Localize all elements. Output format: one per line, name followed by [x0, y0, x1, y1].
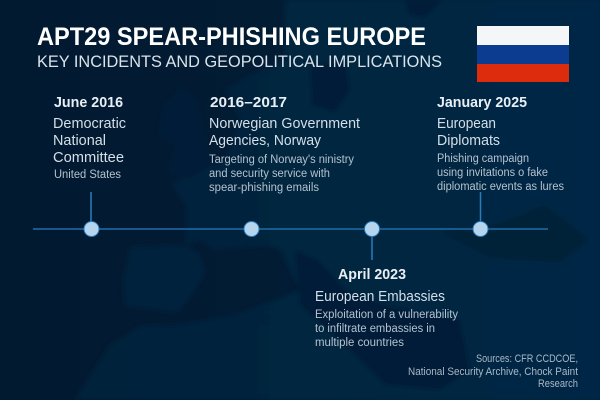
event: April 2023: to infiltrate embassies in — [315, 323, 435, 335]
event: January 2025: European — [437, 115, 496, 132]
sources — [408, 353, 578, 390]
event: June 2016: United States — [54, 169, 121, 181]
event: 2016-2017: and security service with — [209, 168, 330, 180]
sources: Sources: CFR CCDCOE, — [476, 353, 578, 365]
event: April 2023: multiple countries — [315, 337, 404, 349]
event: 2016-2017: Targeting of Norway's ninistry — [209, 154, 354, 166]
timeline — [33, 192, 548, 260]
sources: National Security Archive, Chock Paint — [408, 366, 578, 378]
event: January 2025: January 2025 — [437, 94, 527, 111]
event: April 2023: Exploitation of a vulnerability — [315, 309, 458, 321]
event: June 2016: June 2016 — [54, 94, 123, 111]
event: 2016-2017: Agencies, Norway — [209, 132, 321, 149]
event: January 2025: using invitations o fake — [437, 167, 548, 179]
event: 2016-2017 — [209, 94, 361, 194]
event: January 2025: Diplomats — [437, 132, 500, 149]
event: January 2025: Phishing campaign — [437, 153, 529, 165]
event: June 2016: National — [53, 132, 106, 149]
event: January 2025: diplomatic events as lures — [437, 181, 564, 193]
marker: January 2025 — [473, 222, 488, 236]
event: April 2023: April 2023 — [338, 266, 406, 283]
event: January 2025 — [437, 94, 564, 193]
sources: Research — [538, 378, 578, 390]
event: June 2016 — [53, 94, 126, 181]
event: April 2023 — [315, 266, 458, 349]
marker: 2016-2017 — [244, 222, 259, 236]
subtitle: KEY INCIDENTS AND GEOPOLITICAL IMPLICATIONS — [37, 52, 442, 71]
marker: June 2016 — [84, 222, 99, 236]
marker: April 2023 — [364, 222, 380, 236]
icon: Russian flag — [477, 26, 569, 82]
event: April 2023: European Embassies — [315, 288, 445, 305]
event: 2016-2017: Norwegian Government — [209, 115, 361, 132]
title: APT29 SPEAR-PHISHING EUROPE — [37, 23, 426, 51]
event: June 2016: Democratic — [53, 115, 126, 132]
event: June 2016: Committee — [53, 149, 124, 166]
event: 2016-2017: 2016–2017 — [210, 94, 287, 111]
event: 2016-2017: spear-phishing emails — [209, 182, 319, 194]
